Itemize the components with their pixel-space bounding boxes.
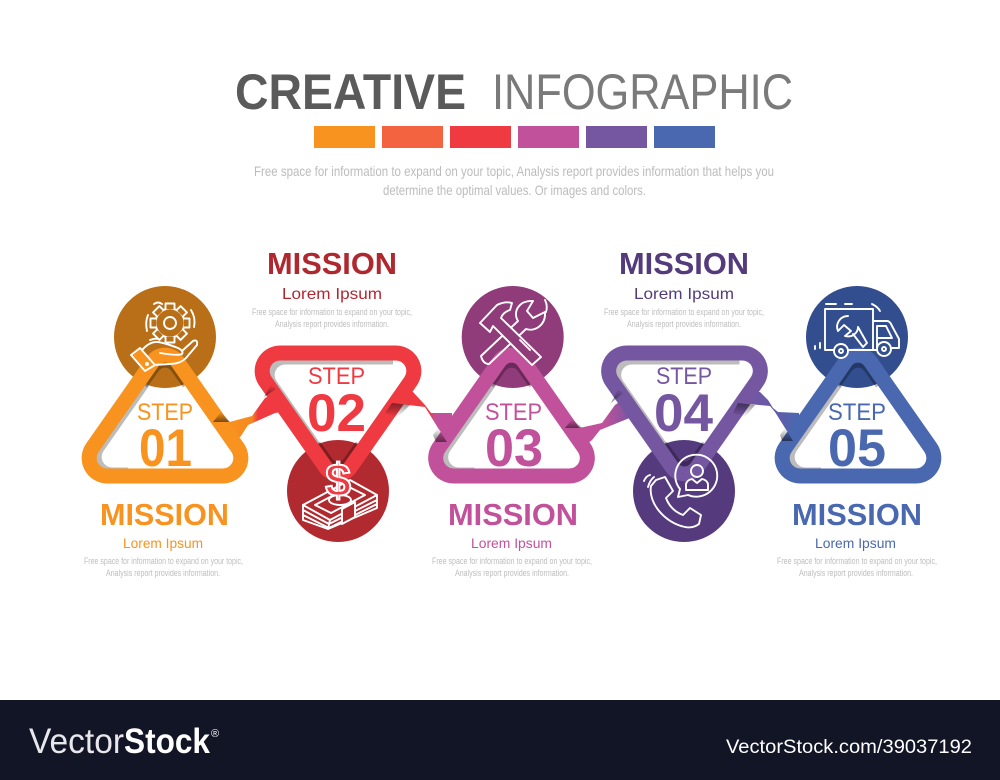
mission text 2 bbox=[252, 246, 412, 329]
step 05 label: 05 bbox=[828, 419, 886, 478]
mission text 2: Analysis report provides information. bbox=[275, 319, 389, 329]
mission text 5: Analysis report provides information. bbox=[799, 568, 913, 578]
icon circle 4 bbox=[633, 440, 735, 542]
connector ribbon 2 to 3 bbox=[392, 392, 452, 448]
mission text 5: Free space for information to expand on your topic, bbox=[777, 556, 937, 566]
icon circle 3 bbox=[462, 286, 564, 388]
step 03 label: 03 bbox=[485, 419, 543, 478]
icon circle 5 bbox=[806, 286, 908, 388]
step 04 label: 04 bbox=[654, 384, 714, 443]
icon: service truck bbox=[815, 304, 899, 358]
footer bar: VectorStock.com/39037192 bbox=[726, 737, 972, 758]
step 02 triangle bbox=[262, 353, 414, 542]
connector ribbon 1 to 2 bbox=[222, 393, 282, 445]
mission text 3 bbox=[432, 497, 592, 578]
step 03 label: STEP bbox=[485, 399, 542, 426]
mission text 5: Lorem Ipsum bbox=[815, 535, 896, 551]
icon: dollar and money stack bbox=[303, 454, 377, 529]
mission text 1: Analysis report provides information. bbox=[106, 568, 220, 578]
icon: phone and support person bbox=[644, 455, 717, 527]
step 05 triangle bbox=[780, 286, 934, 476]
footer bar: Stock bbox=[124, 722, 210, 761]
mission text 1: Lorem Ipsum bbox=[123, 535, 203, 551]
mission text 4: Lorem Ipsum bbox=[634, 286, 734, 303]
footer bar: Vector bbox=[29, 722, 124, 761]
mission text 4 bbox=[604, 246, 764, 329]
title: INFOGRAPHIC bbox=[492, 64, 793, 120]
step 05 label: STEP bbox=[828, 399, 886, 426]
step 01 triangle bbox=[89, 286, 241, 476]
title: CREATIVE bbox=[235, 64, 466, 120]
connector ribbon 4 to 5 bbox=[738, 392, 799, 445]
title bbox=[235, 64, 793, 120]
colour legend bars bbox=[314, 126, 715, 148]
mission text 3: MISSION bbox=[448, 497, 578, 532]
mission text 3: Lorem Ipsum bbox=[471, 535, 552, 551]
mission text 2: Free space for information to expand on your topic, bbox=[252, 307, 412, 317]
mission text 4: Analysis report provides information. bbox=[627, 319, 741, 329]
mission text 2: Lorem Ipsum bbox=[282, 286, 382, 303]
step 01 label: 01 bbox=[139, 419, 192, 478]
mission text 5 bbox=[777, 497, 937, 578]
step 04 label: STEP bbox=[656, 363, 712, 390]
subtitle text bbox=[254, 163, 774, 198]
mission text 4: Free space for information to expand on your topic, bbox=[604, 307, 764, 317]
subtitle text: Free space for information to expand on your topic, Analysis report provides information that helps you bbox=[254, 163, 774, 179]
icon circle 1 bbox=[114, 286, 216, 388]
icon: hammer and wrench bbox=[480, 300, 547, 365]
connector ribbon 3 to 4 bbox=[575, 400, 632, 450]
mission text 1 bbox=[84, 497, 243, 578]
mission text 2: MISSION bbox=[267, 246, 397, 281]
icon: dollar and money stack: $ bbox=[325, 454, 351, 506]
mission text 4: MISSION bbox=[619, 246, 749, 281]
step 01 label bbox=[137, 399, 193, 478]
footer bar: ® bbox=[211, 728, 219, 740]
icon circle 2 bbox=[287, 440, 389, 542]
icon: gear on hand bbox=[131, 302, 197, 371]
step 02 label: STEP bbox=[308, 363, 365, 390]
mission text 5: MISSION bbox=[792, 497, 922, 532]
mission text 3: Analysis report provides information. bbox=[455, 568, 569, 578]
step 02 label: 02 bbox=[307, 384, 366, 443]
step 03 triangle bbox=[433, 286, 587, 476]
footer bar bbox=[0, 700, 1000, 780]
step 01 label: STEP bbox=[137, 399, 193, 426]
subtitle text: determine the optimal values. Or images and colors. bbox=[383, 182, 646, 198]
step 04 triangle bbox=[609, 353, 760, 542]
mission text 3: Free space for information to expand on your topic, bbox=[432, 556, 592, 566]
mission text 1: Free space for information to expand on your topic, bbox=[84, 556, 243, 566]
mission text 1: MISSION bbox=[100, 497, 229, 532]
